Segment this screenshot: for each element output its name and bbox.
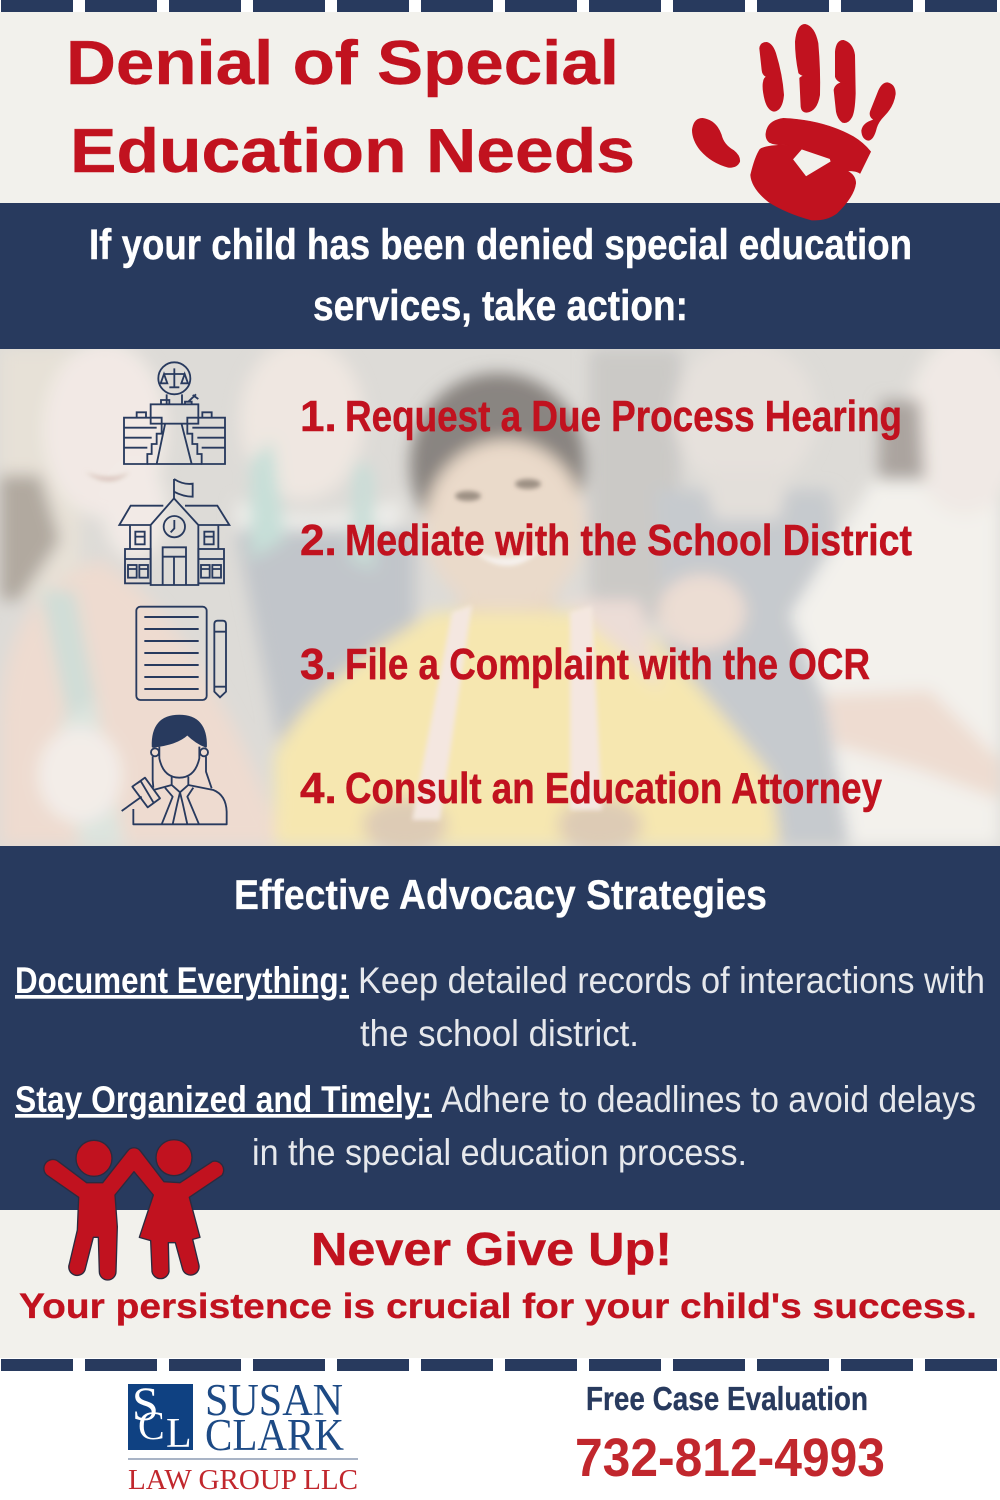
logo: Susan Clark Law Group: CLARK [205, 1410, 344, 1460]
logo: Susan Clark Law Group: LAW GROUP LLC [128, 1464, 358, 1496]
title [66, 29, 635, 186]
step 1 text: 1. [300, 392, 337, 441]
step 4 text: Consult an Education Attorney [345, 764, 882, 813]
panel: photo background with children [0, 335, 1000, 851]
strategy 2 text [15, 1079, 976, 1173]
step 3 text: File a Complaint with the OCR [345, 640, 870, 689]
back child left [240, 340, 364, 500]
icon: two children holding hands [44, 1140, 224, 1280]
center face [425, 440, 585, 610]
header panel [0, 12, 1000, 203]
free case evaluation label: Free Case Evaluation [586, 1380, 868, 1417]
center neck [536, 600, 552, 611]
right child [790, 470, 1000, 846]
callout heading: Never Give Up! [311, 1223, 672, 1275]
icon: school building [119, 479, 229, 585]
lower dashed border [1, 1359, 997, 1371]
panel: never give up [0, 1210, 1000, 1358]
subtitle text [89, 221, 912, 330]
subtitle band [0, 203, 1000, 349]
panel: advocacy strategies [0, 846, 1000, 1210]
strategy 1 text: the school district. [360, 1013, 639, 1054]
phone number: 732-812-4993 [575, 1428, 885, 1488]
advocacy heading: Effective Advocacy Strategies [234, 871, 767, 918]
step 1 text: Request a Due Process Hearing [345, 392, 902, 441]
logo: Susan Clark Law Group: L [166, 1411, 192, 1457]
logo: Susan Clark Law Group: C [138, 1403, 165, 1448]
icon: attorney [122, 716, 227, 824]
step 3 text: 3. [300, 640, 337, 689]
title: Education Needs [70, 117, 635, 186]
center hair [410, 373, 586, 557]
step 4 text: 4. [300, 764, 337, 813]
logo: Susan Clark Law Group: S [132, 1378, 159, 1431]
step 2 text: 2. [300, 516, 337, 565]
facial features [455, 491, 481, 501]
title: Denial of Special [66, 29, 619, 98]
hands [363, 799, 447, 851]
step 2 text: Mediate with the School District [345, 516, 912, 565]
strategy 1 text [15, 960, 985, 1054]
icon: red handprint [693, 25, 895, 220]
strategy 2 text: in the special education process. [252, 1132, 747, 1173]
callout text: Your persistence is crucial for your child's success. [19, 1287, 977, 1326]
logo: Susan Clark Law Group [128, 1375, 358, 1496]
back children right [673, 340, 817, 490]
icon: courtroom [124, 362, 225, 464]
icon: document and pencil [136, 607, 226, 700]
logo: Susan Clark Law Group: SUSAN [205, 1375, 343, 1425]
left child face and body [43, 342, 167, 518]
center straps [412, 605, 472, 820]
strategy 1 text: Document Everything: [15, 960, 349, 1001]
center body yellow shirt [274, 612, 780, 846]
subtitle text: services, take action: [313, 282, 688, 330]
top dashed border [1, 0, 997, 12]
strategy 2 text: Stay Organized and Timely: [15, 1079, 432, 1120]
